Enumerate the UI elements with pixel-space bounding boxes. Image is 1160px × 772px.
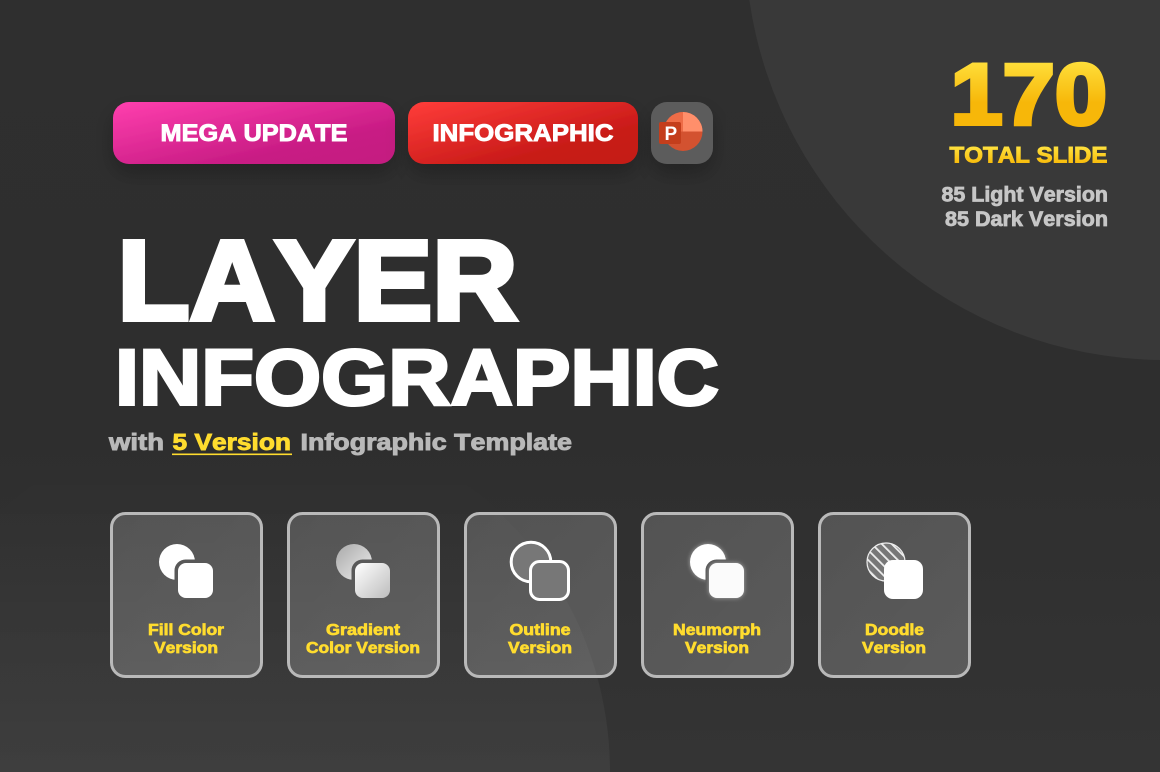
label [306,622,420,657]
badge: mega update [113,102,395,164]
icon: powerpoint: P [664,124,678,145]
subtitle: Infographic Template [300,429,572,455]
icon: outline layers [511,542,568,600]
label [673,622,761,657]
label: Version [154,640,218,657]
card: doodle version [820,514,970,676]
card: gradient color version [288,514,438,676]
stat: 170 total slide: 85 Dark Version [945,208,1108,231]
label: Neumorph [673,622,761,639]
label: Version [862,640,926,657]
stat: 170 total slide: TOTAL SLIDE [950,143,1108,168]
label: Gradient [326,622,400,639]
title: infographic: INFOGRAPHIC [115,334,719,422]
label: Version [508,640,572,657]
icon: doodle layers [867,543,923,599]
stat: 170 total slide: 170 [950,47,1107,143]
icon: powerpoint [651,102,713,164]
card: outline version [466,514,616,676]
card: fill color version [112,514,262,676]
label: Outline [510,622,571,639]
card: neumorph version [642,514,792,676]
stat: 170 total slide: 85 Light Version [942,184,1108,206]
label: Doodle [865,622,924,639]
icon: neumorph layers [690,544,744,598]
label: Fill Color [148,622,224,639]
label [508,622,572,657]
badge: infographic [408,102,638,164]
label [862,622,926,657]
subtitle [108,429,572,455]
badge: infographic: INFOGRAPHIC [432,120,614,147]
title: layer: LAYER [118,218,518,344]
subtitle: with [108,429,164,455]
icon: gradient layers [336,544,390,598]
label [148,622,224,657]
label: Color Version [306,640,420,657]
label: Version [685,640,749,657]
badge: mega update: MEGA UPDATE [160,120,348,147]
icon: fill layers [159,544,213,598]
subtitle: 5 Version [172,429,291,455]
stat: 170 total slide [942,47,1108,231]
